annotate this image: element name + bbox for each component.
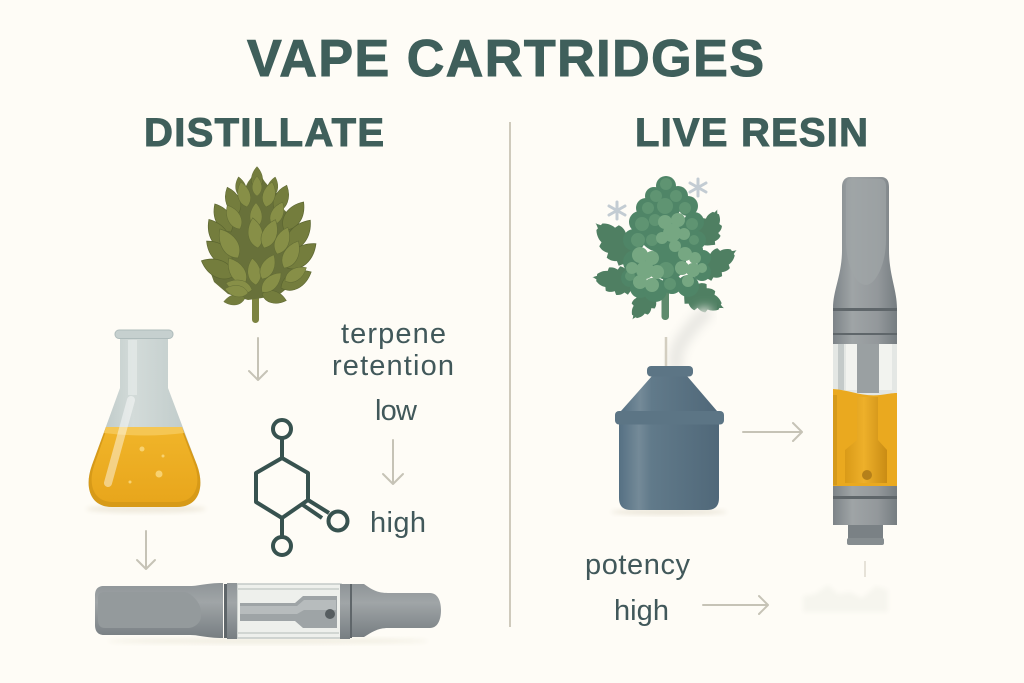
arrow: low to high: [383, 440, 403, 484]
center divider: [509, 122, 511, 627]
icon: frosted green bud: [583, 176, 744, 326]
icon: dried olive plant bud: [198, 167, 322, 323]
label: terpene retention: terpene: [341, 318, 446, 350]
icon: molecule diagram: [256, 420, 348, 555]
arrow: flask to cartridge: [137, 531, 155, 569]
panel: distillate: [86, 111, 454, 644]
heading: live resin: LIVE RESIN: [635, 111, 868, 155]
arrow: vessel to cartridge: [743, 423, 802, 441]
icon: flask with golden oil: [86, 330, 206, 513]
faded erased smudge: [803, 561, 888, 612]
arrow: bud to molecule: [249, 338, 267, 380]
steam and tube: [666, 314, 705, 366]
arrow: high to faded area: [703, 596, 768, 614]
label: potency: potency: [585, 549, 690, 581]
title: VAPE CARTRIDGES: [247, 30, 764, 88]
icon: vertical vape cartridge with oil: [833, 177, 897, 545]
heading: distillate: DISTILLATE: [144, 111, 384, 155]
label: high: high: [370, 507, 426, 539]
label: low: low: [375, 395, 418, 427]
panel: live resin: [583, 111, 897, 627]
label: terpene retention: [332, 318, 454, 382]
icon: snowflake left: [609, 202, 625, 219]
label: terpene retention: retention: [332, 350, 454, 382]
label: high: high: [614, 595, 669, 627]
icon: horizontal vape cartridge: [95, 583, 441, 644]
icon: snowflake right: [690, 179, 706, 196]
icon: extraction vessel: [611, 366, 727, 515]
